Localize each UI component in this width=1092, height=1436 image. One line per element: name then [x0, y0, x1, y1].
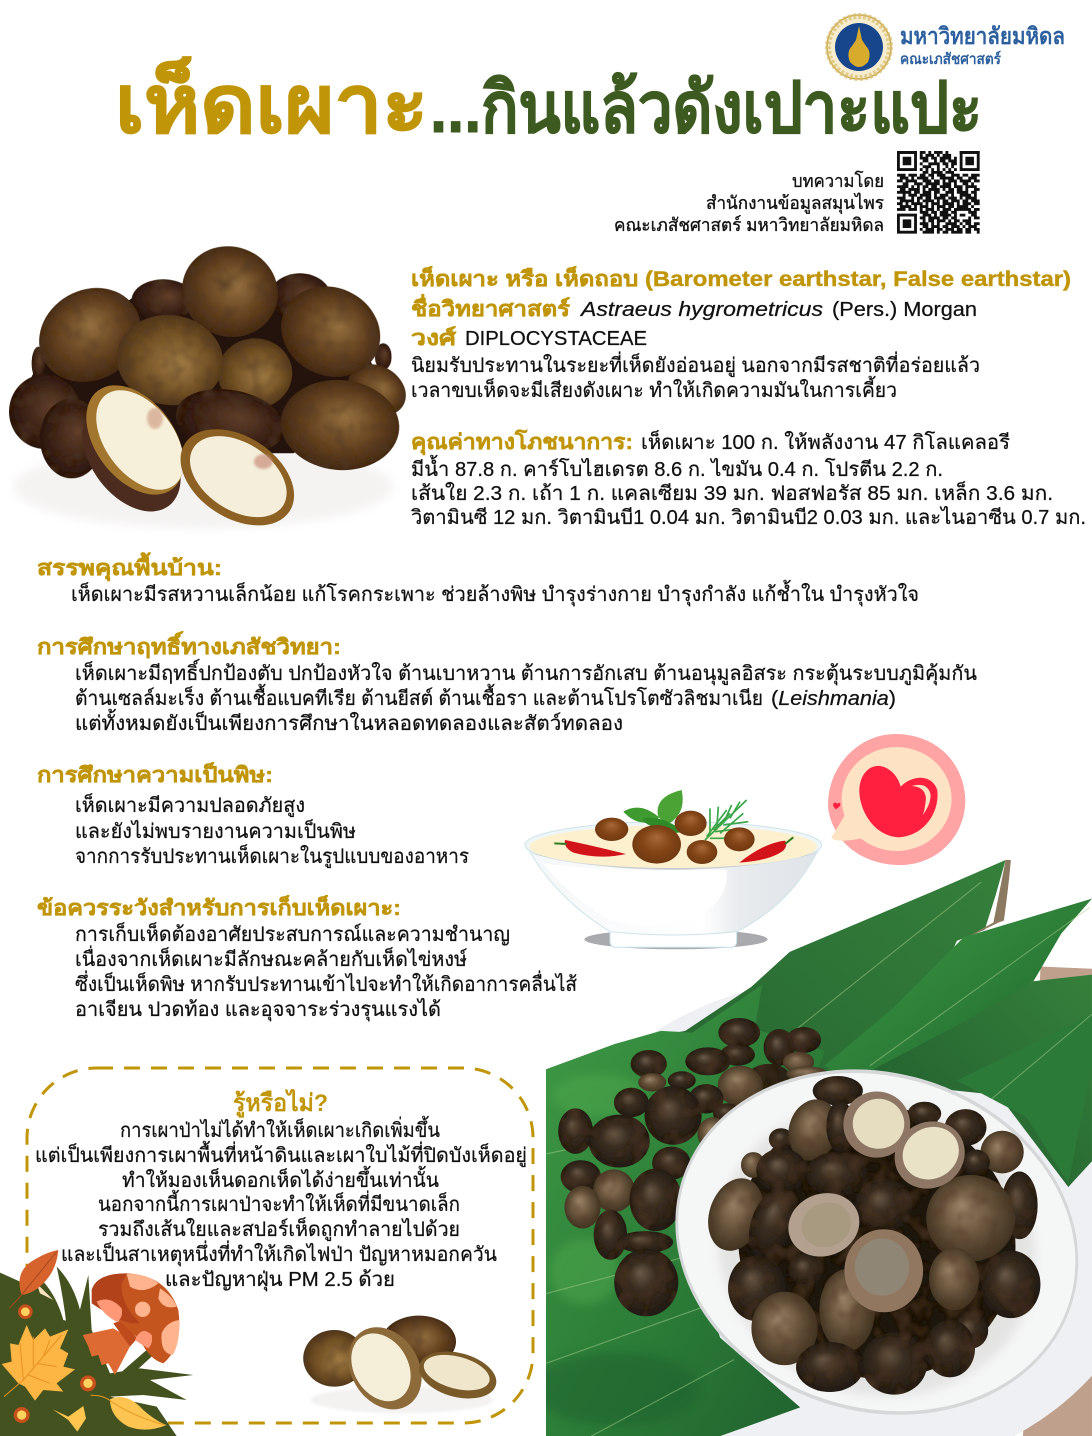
- section: toxicity: การศึกษาความเป็นพิษ:: [37, 761, 273, 787]
- photo: mushrooms in white bowl on leaves: [532, 860, 1092, 1436]
- leaf: orange: [9, 1250, 58, 1308]
- white bowl: [675, 1069, 1078, 1415]
- sauce mushrooms: [595, 811, 755, 864]
- panel: did you know: และเป็นสาเหตุหนึ่งที่ทำให้เกิดไฟป่า ปัญหาหมอกควัน: [61, 1240, 497, 1267]
- cut mushroom caps: [782, 1091, 974, 1312]
- panel: identity and description: วงศ์: [411, 326, 457, 350]
- panel: nutrition: เห็ดเผาะ 100 ก. ให้พลังงาน 47 กิโลแคลอรี: [641, 429, 1010, 454]
- section: collection warning: เนื่องจากเห็ดเผาะมีลักษณะคล้ายกับเห็ดไข่หงษ์: [75, 945, 467, 971]
- icon: heart speech bubble: [828, 734, 965, 865]
- title: [115, 56, 982, 149]
- dill: [705, 800, 748, 840]
- title: ...กินแล้วดังเปาะแปะ: [430, 69, 982, 147]
- section: collection warning: [37, 894, 577, 1022]
- section: pharmacology: แต่ทั้งหมดยังเป็นเพียงการศึกษาในหลอดทดลองและสัตว์ทดลอง: [75, 709, 623, 735]
- panel: did you know: การเผาป่าไม่ได้ทำให้เห็ดเผาะเกิดเพิ่มขึ้น: [120, 1116, 440, 1142]
- logo: Mahidol University Faculty of Pharmacy: คณะเภสัชศาสตร์: [900, 50, 1002, 68]
- panel: identity and description: Astraeus hygrometricus: [580, 299, 823, 321]
- panel: nutrition: [411, 429, 1086, 529]
- white plate: [654, 992, 1092, 1436]
- logo: Mahidol University Faculty of Pharmacy: มหาวิทยาลัยมหิดล: [900, 23, 1065, 49]
- panel: did you know: [27, 1068, 533, 1423]
- mushrooms on leaf: [558, 1018, 828, 1316]
- panel: identity and description: ชื่อวิทยาศาสตร์: [411, 293, 571, 321]
- leaf: yellow: [91, 1395, 167, 1430]
- cut mushroom 2: [163, 409, 312, 545]
- panel: identity and description: DIPLOCYSTACEAE: [465, 328, 647, 350]
- panel: did you know: รู้หรือไม่?: [233, 1088, 328, 1118]
- section: toxicity: และยังไม่พบรายงานความเป็นพิษ: [75, 818, 356, 843]
- section: folk remedies: [37, 552, 919, 607]
- section: collection warning: ข้อควรระวังสำหรับการเก็บเห็ดเผาะ:: [37, 894, 401, 920]
- section: pharmacology: (Leishmania ): [771, 688, 896, 710]
- panel: nutrition: มีน้ำ 87.8 ก. คาร์โบไฮเดรต 8.6 ก. ไขมัน 0.4 ก. โปรตีน 2.2 ก.: [411, 455, 943, 481]
- leaf: maple yellow: [2, 1325, 75, 1401]
- title: เห็ดเผาะ: [115, 56, 428, 149]
- panel: identity and description: (Pers.) Morgan: [832, 299, 977, 321]
- credit text: คณะเภสัชศาสตร์ มหาวิทยาลัยมหิดล: [614, 215, 884, 235]
- section: collection warning: ซึ่งเป็นเห็ดพิษ หากรับประทานเข้าไปจะทำให้เกิดอาการคลื่นไส้: [75, 970, 577, 996]
- credit text: สำนักงานข้อมูลสมุนไพร: [706, 192, 884, 214]
- section: toxicity: จากการรับประทานเห็ดเผาะในรูปแบบของอาหาร: [75, 843, 469, 869]
- logo: Mahidol University Faculty of Pharmacy: [827, 15, 1065, 79]
- panel: nutrition: วิตามินซี 12 มก. วิตามินบี1 0.04 มก. วิตามินบี2 0.03 มก. และไนอาซีน 0.7 มก.: [411, 506, 1086, 529]
- section: collection warning: การเก็บเห็ดต้องอาศัยประสบการณ์และความชำนาญ: [75, 921, 510, 946]
- panel: nutrition: เส้นใย 2.3 ก. เถ้า 1 ก. แคลเซียม 39 มก. ฟอสฟอรัส 85 มก. เหล็ก 3.6 มก.: [411, 480, 1053, 505]
- panel: did you know: แต่เป็นเพียงการเผาพื้นที่หน้าดินและเผาใบไม้ที่ปิดบังเห็ดอยู่: [35, 1141, 527, 1168]
- panel: did you know: นอกจากนี้การเผาป่าจะทำให้เห็ดที่มีขนาดเล็ก: [98, 1190, 460, 1216]
- panel: identity and description: เห็ดเผาะ หรือ เห็ดถอบ (Barometer earthstar, False earthstar): [411, 265, 1071, 291]
- panel: identity and description: นิยมรับประทานในระยะที่เห็ดยังอ่อนอยู่ นอกจากมีรสชาติที่อร่อยแล้ว: [411, 351, 980, 378]
- section: folk remedies: เห็ดเผาะมีรสหวานเล็กน้อย แก้โรคกระเพาะ ช่วยล้างพิษ บำรุงร่างกาย บำรุงกำลัง แก้ช้ำใน บำรุงหัวใจ: [71, 580, 919, 607]
- photo: small mushrooms: [303, 1314, 502, 1422]
- photo: pile of hed phao mushrooms: [9, 233, 415, 545]
- credit text: [614, 170, 884, 235]
- panel: nutrition: คุณค่าทางโภชนาการ:: [411, 429, 633, 456]
- panel: did you know: และปัญหาฝุ่น PM 2.5 ด้วย: [165, 1269, 395, 1292]
- section: pharmacology: [37, 631, 977, 735]
- illustration: bowl of mushroom dish: [525, 790, 822, 949]
- leaf: ginkgo: [53, 1406, 86, 1432]
- credit text: บทความโดย: [792, 170, 884, 191]
- section: pharmacology: เห็ดเผาะมีฤทธิ์ปกป้องตับ ปกป้องหัวใจ ต้านเบาหวาน ต้านการอักเสบ ต้านอนุมูลอิสระ กระตุ้นระบบภูมิคุ้มกัน: [75, 658, 977, 686]
- flowers: [14, 1304, 96, 1423]
- leaves: [532, 860, 1092, 1436]
- panel: did you know: รวมถึงเส้นใยและสปอร์เห็ดถูกทำลายไปด้วย: [98, 1216, 460, 1242]
- section: pharmacology: ต้านเซลล์มะเร็ง ต้านเชื้อแบคทีเรีย ต้านยีสต์ ต้านเชื้อรา และต้านโปรโตซัวลิชมาเนีย: [75, 684, 763, 710]
- wood background: [1023, 967, 1092, 1436]
- illustration: autumn mushroom and leaves: [0, 1250, 193, 1436]
- section: folk remedies: สรรพคุณพื้นบ้าน:: [37, 552, 222, 582]
- panel: identity and description: [411, 265, 1071, 402]
- section: toxicity: [37, 761, 469, 869]
- mushrooms in bowl: [698, 1075, 1043, 1410]
- panel: identity and description: เวลาขบเห็ดจะมีเสียงดังเผาะ ทำให้เกิดความมันในการเคี้ยว: [411, 376, 897, 402]
- panel: did you know: ทำให้มองเห็นดอกเห็ดได้ง่ายขึ้นเท่านั้น: [122, 1166, 439, 1192]
- cut mushroom 1: [63, 367, 204, 530]
- QR code: [897, 151, 980, 234]
- mushroom: [83, 1273, 179, 1375]
- section: toxicity: เห็ดเผาะมีความปลอดภัยสูง: [75, 792, 305, 818]
- basil: [623, 790, 683, 833]
- chili peppers: [554, 837, 793, 863]
- section: collection warning: อาเจียน ปวดท้อง และอุจจาระร่วงรุนแรงได้: [75, 998, 441, 1022]
- section: pharmacology: การศึกษาฤทธิ์ทางเภสัชวิทยา:: [37, 631, 341, 659]
